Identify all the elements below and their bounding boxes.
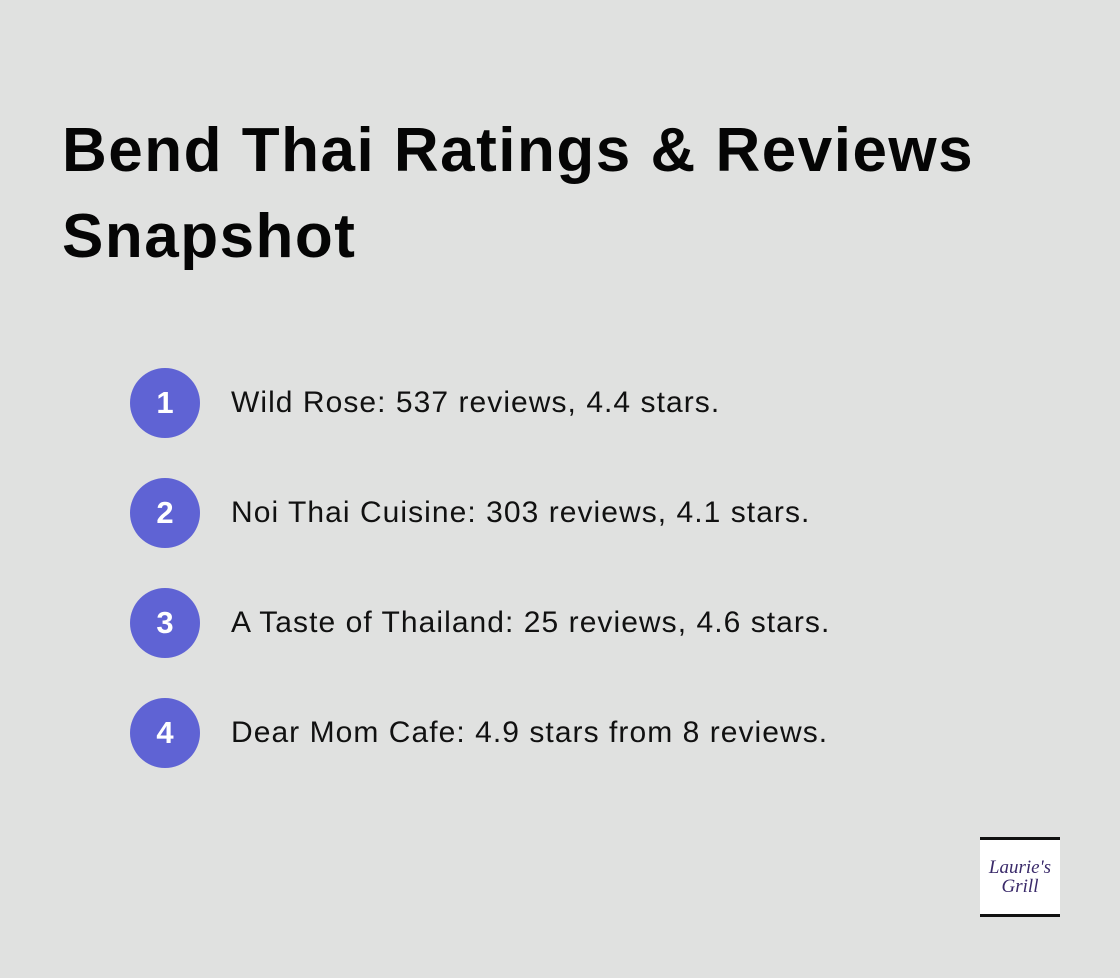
- item 4: 4: [156, 715, 174, 750]
- logo: Grill: [1002, 876, 1038, 897]
- item 3: A Taste of Thailand: 25 reviews, 4.6 stars.: [231, 606, 830, 639]
- title: Bend Thai Ratings & Reviews: [62, 116, 974, 185]
- item 3: [130, 588, 830, 658]
- item 1: 1: [156, 385, 174, 420]
- item 1: Wild Rose: 537 reviews, 4.4 stars.: [231, 386, 720, 419]
- title: Snapshot: [62, 202, 356, 271]
- item 1: [130, 368, 720, 438]
- item 3: 3: [156, 605, 174, 640]
- item 4: Dear Mom Cafe: 4.9 stars from 8 reviews.: [231, 716, 828, 749]
- item 2: 2: [156, 495, 174, 530]
- title: [62, 116, 974, 271]
- logo: [980, 837, 1060, 917]
- item 4: [130, 698, 828, 768]
- item 2: [130, 478, 810, 548]
- item 2: Noi Thai Cuisine: 303 reviews, 4.1 stars.: [231, 496, 810, 529]
- logo: Laurie's: [989, 857, 1051, 878]
